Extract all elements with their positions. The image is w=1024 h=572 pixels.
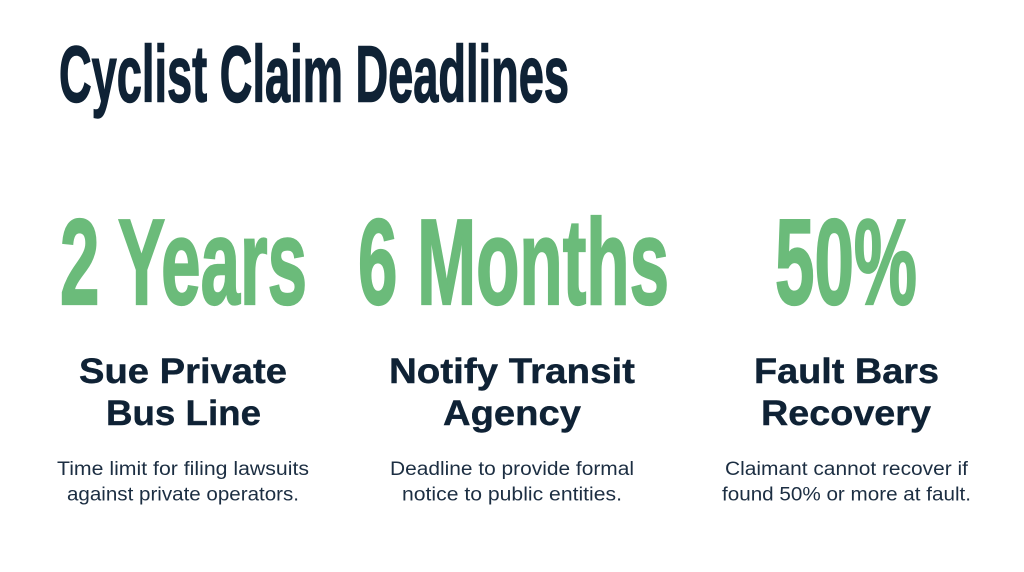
stat: 6 months: 6 Months	[358, 194, 669, 330]
heading: notify transit agency: Notify Transit	[389, 352, 635, 391]
panel: notify transit agency	[358, 194, 669, 506]
heading: sue private bus line: Sue Private	[79, 352, 287, 391]
description: private operators: Time limit for filing lawsuits	[57, 459, 309, 480]
stat: 2 years: 2 Years	[60, 194, 307, 330]
description: fault threshold: found 50% or more at fault.	[722, 484, 971, 506]
heading: sue private bus line: Bus Line	[106, 394, 261, 433]
stat: 50 percent: 50%	[775, 194, 917, 330]
panel: sue private bus line	[57, 194, 309, 506]
description: public entities: notice to public entities.	[402, 484, 622, 506]
heading: fault bars recovery	[754, 352, 939, 433]
description: private operators	[57, 459, 309, 506]
heading: fault bars recovery: Fault Bars	[754, 352, 939, 391]
description: public entities	[390, 459, 634, 506]
description: public entities: Deadline to provide formal	[390, 459, 634, 480]
heading: sue private bus line	[79, 352, 287, 433]
heading: notify transit agency: Agency	[443, 394, 582, 433]
heading: fault bars recovery: Recovery	[761, 394, 932, 433]
panel: fault bars recovery	[722, 194, 971, 506]
description: private operators: against private operators.	[67, 484, 299, 506]
title: Cyclist Claim Deadlines	[59, 30, 569, 118]
description: fault threshold: Claimant cannot recover if	[725, 459, 969, 480]
heading: notify transit agency	[389, 352, 635, 433]
description: fault threshold	[722, 459, 971, 506]
